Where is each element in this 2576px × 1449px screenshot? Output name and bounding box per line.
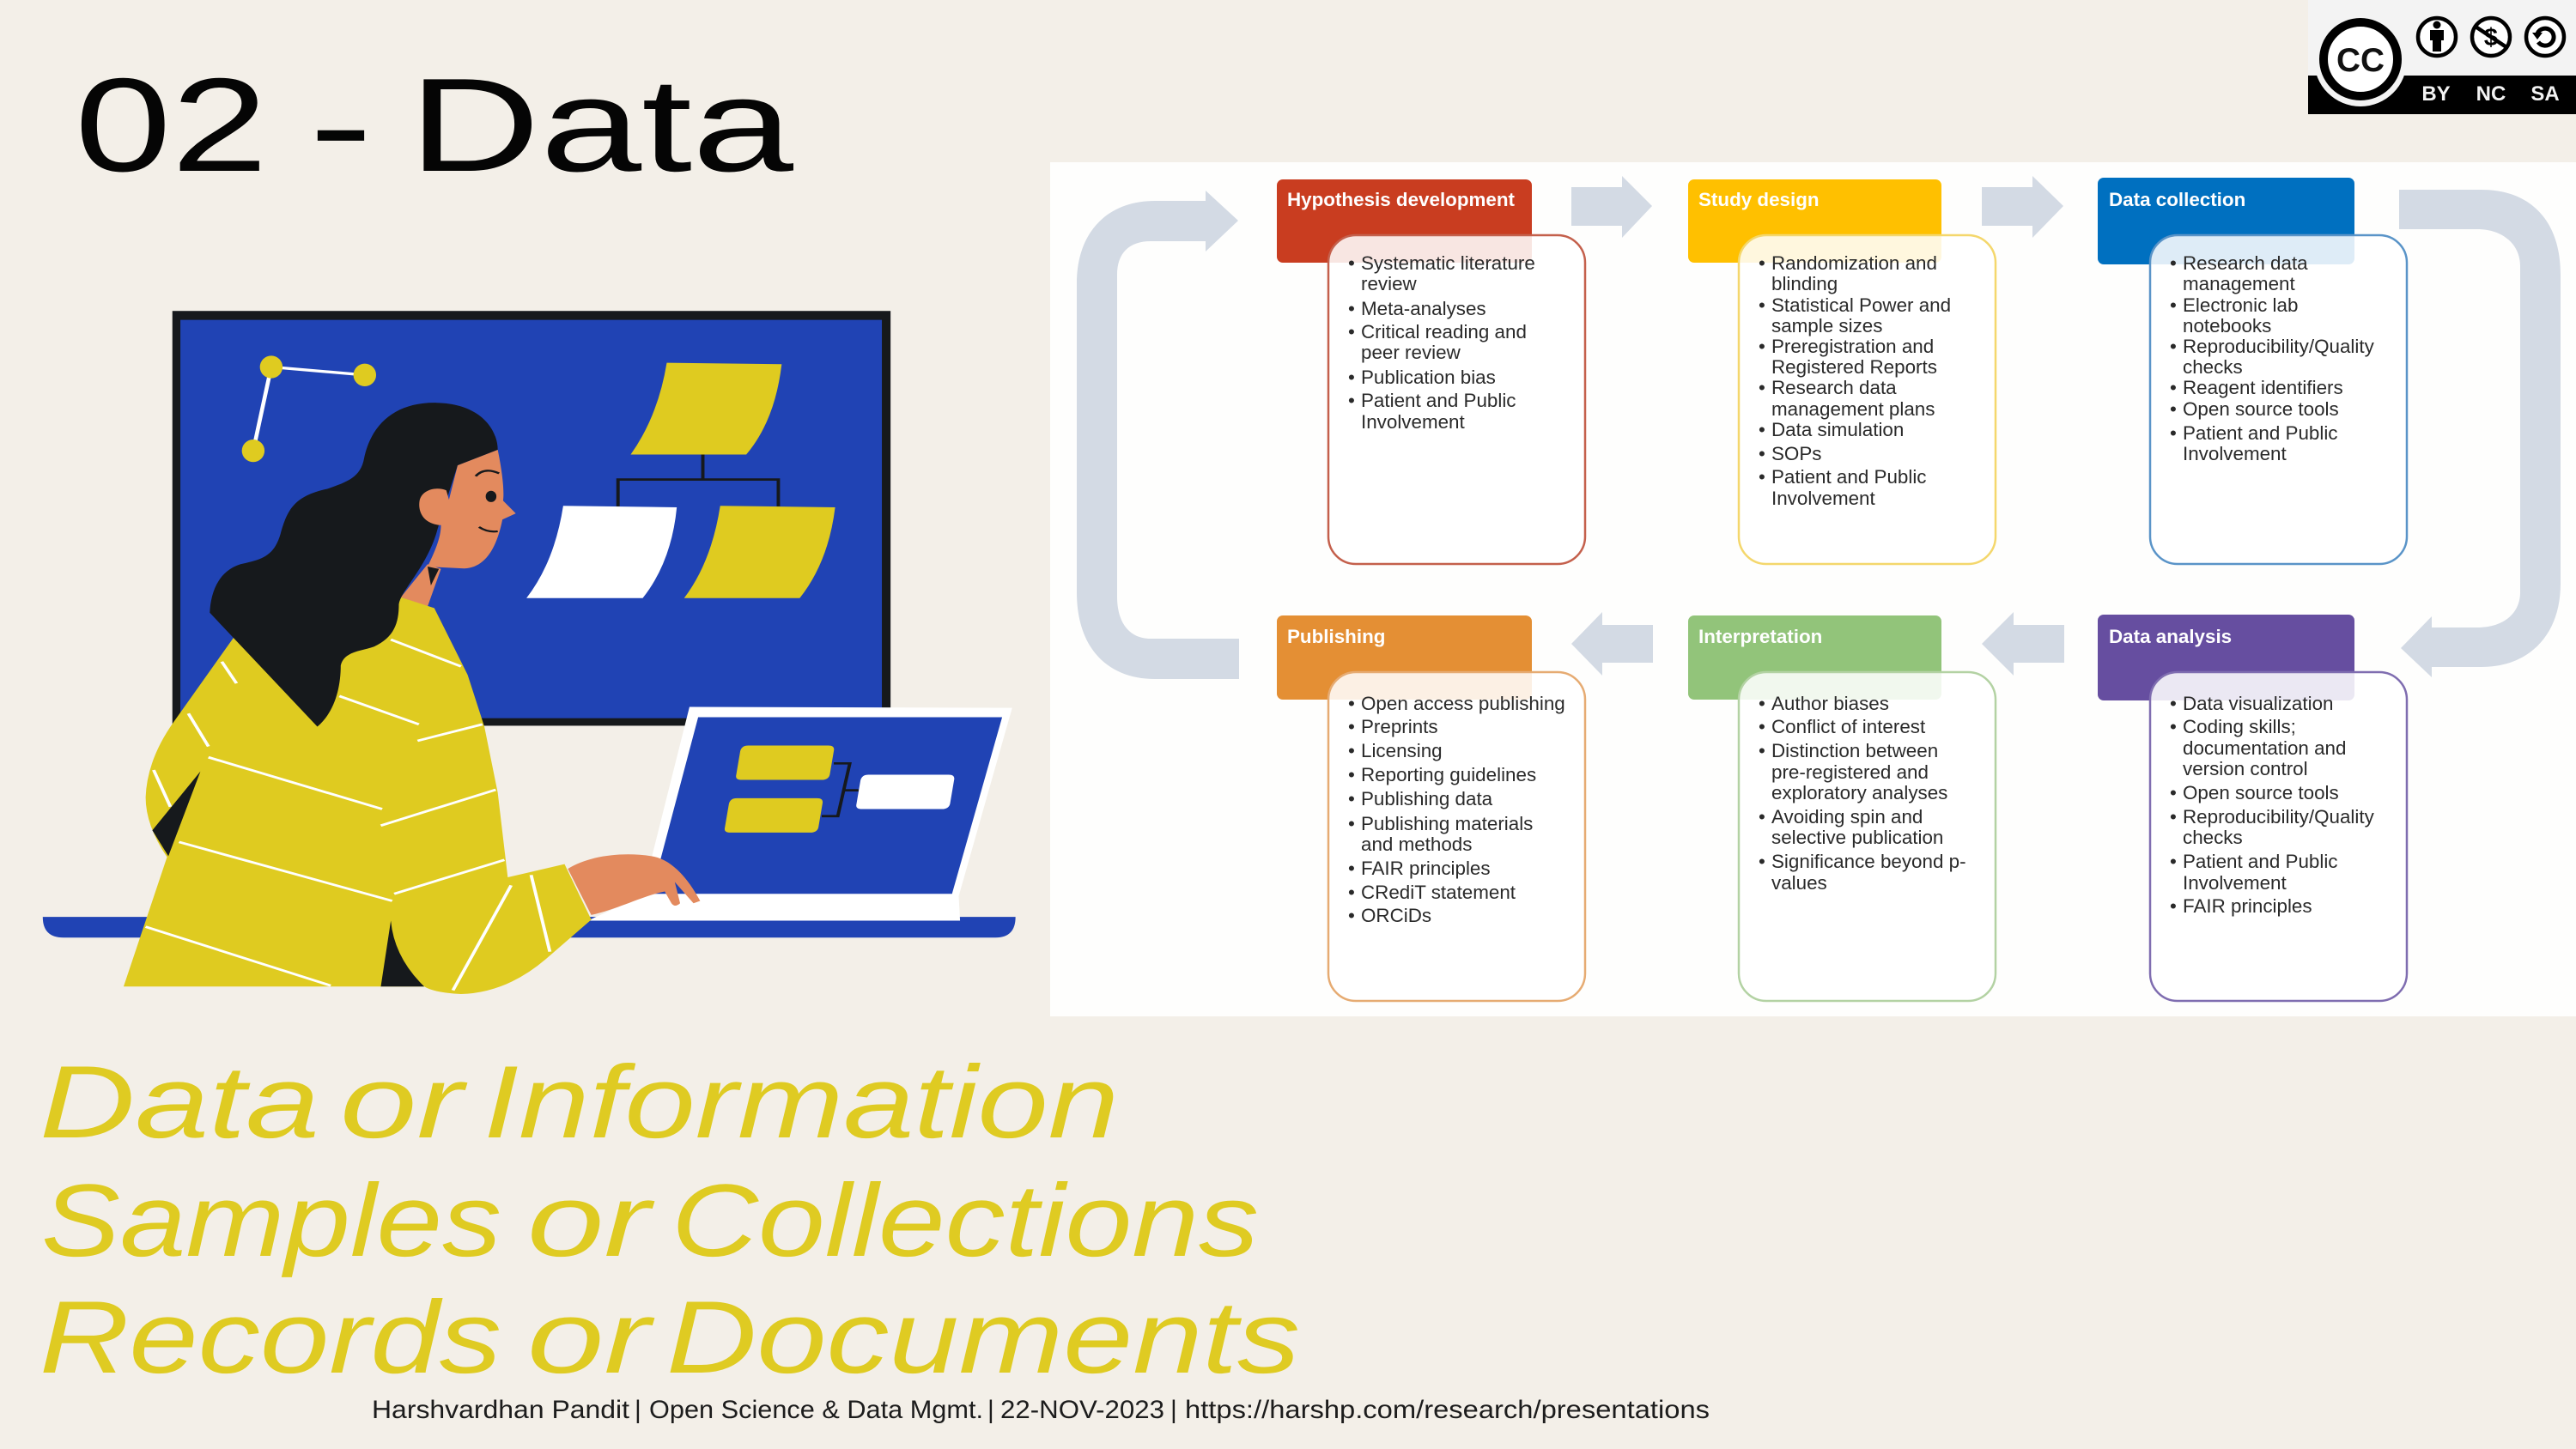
keyword lines: Documents (666, 1280, 1300, 1395)
card: publishing: • (1348, 693, 1355, 714)
card: publishing: Publishing materials (1361, 813, 1533, 834)
laptop (588, 706, 1012, 920)
card: data collection: Research data (2183, 252, 2308, 274)
card: data collection: • (2170, 398, 2177, 420)
keyword lines: Records (39, 1280, 501, 1395)
illustration: woman working at laptop in front of board (43, 311, 1016, 994)
footer: | (635, 1396, 641, 1424)
card: study design: Research data (1771, 377, 1897, 398)
panel: research cycle diagram (1050, 162, 2576, 1016)
card: study design: sample sizes (1771, 315, 1882, 336)
card: publishing: Open access publishing (1361, 693, 1565, 714)
card: publishing: • (1348, 813, 1355, 834)
badge labels (2421, 82, 2560, 106)
card: publishing: • (1348, 882, 1355, 903)
card: hypothesis development: • (1348, 367, 1355, 388)
card: publishing: and methods (1361, 834, 1472, 855)
card: data collection: Reproducibility/Quality (2183, 336, 2375, 357)
card: publishing: Publishing data (1361, 788, 1493, 809)
card: hypothesis development: • (1348, 252, 1355, 274)
card: study design: • (1759, 443, 1765, 464)
keyword lines: or (527, 1280, 654, 1395)
card: data collection: • (2170, 252, 2177, 274)
card: study design: • (1759, 336, 1765, 357)
keyword lines: or (340, 1045, 467, 1160)
badge labels: NC (2476, 82, 2506, 106)
card: data collection: • (2170, 422, 2177, 444)
icon: non-commercial: $ (2484, 24, 2498, 52)
license badge: CC BY-NC-SA (2308, 0, 2576, 114)
card: study design: • (1759, 466, 1765, 488)
card: data collection: management (2183, 273, 2295, 294)
title: 02 (75, 51, 268, 199)
card: publishing: • (1348, 740, 1355, 761)
card: interpretation: • (1759, 740, 1765, 761)
card: interpretation: • (1759, 693, 1765, 714)
card: interpretation: • (1759, 716, 1765, 737)
desk (43, 917, 1016, 937)
badge labels: SA (2530, 82, 2560, 106)
card: hypothesis development: review (1361, 273, 1418, 294)
card: data analysis: • (2170, 806, 2177, 828)
card: data analysis: version control (2183, 758, 2308, 779)
keyword lines: Data (39, 1045, 319, 1160)
card: publishing: • (1348, 788, 1355, 809)
card: data collection: • (2170, 377, 2177, 398)
card: interpretation: Avoiding spin and (1771, 806, 1923, 828)
card: publishing: • (1348, 764, 1355, 785)
arrow: loop from data collection to data analysis (2399, 190, 2561, 677)
card: hypothesis development (1277, 179, 1585, 564)
card: data analysis: • (2170, 693, 2177, 714)
card: data collection: notebooks (2183, 315, 2271, 336)
card: publishing: ORCiDs (1361, 905, 1431, 926)
card: data analysis: Reproducibility/Quality (2183, 806, 2375, 828)
card: study design: • (1759, 252, 1765, 274)
keyword lines: Samples (41, 1163, 501, 1278)
card: hypothesis development: Publication bias (1361, 367, 1496, 388)
card: study design: SOPs (1771, 443, 1821, 464)
card: data collection: Reagent identifiers (2183, 377, 2343, 398)
card: study design: Patient and Public (1771, 466, 1927, 488)
card: publishing: • (1348, 858, 1355, 879)
card: hypothesis development: Systematic literature (1361, 252, 1535, 274)
card: data analysis (2098, 615, 2407, 1001)
title: - (309, 51, 373, 199)
card: data analysis: documentation and (2183, 737, 2346, 759)
card: hypothesis development: • (1348, 321, 1355, 343)
card: data analysis: Involvement (2183, 872, 2287, 894)
card: interpretation: Distinction between (1771, 740, 1938, 761)
badge labels: BY (2421, 82, 2451, 106)
card: interpretation: pre-registered and (1771, 761, 1929, 783)
card: interpretation: Author biases (1771, 693, 1889, 714)
card: hypothesis development: Patient and Public (1361, 390, 1516, 411)
card: data analysis: FAIR principles (2183, 895, 2312, 917)
card: study design: Statistical Power and (1771, 294, 1951, 316)
card: interpretation: Interpretation (1698, 626, 1822, 647)
card: study design: Involvement (1771, 488, 1876, 509)
footer: | (987, 1396, 994, 1424)
card: data collection: Open source tools (2183, 398, 2339, 420)
card: interpretation: exploratory analyses (1771, 782, 1947, 803)
card: data analysis: Open source tools (2183, 782, 2339, 803)
card: study design (1688, 179, 1996, 564)
card: data collection: Electronic lab (2183, 294, 2298, 316)
card: study design: Data simulation (1771, 419, 1904, 440)
card: interpretation (1688, 615, 1996, 1001)
board (173, 311, 890, 725)
card: interpretation: • (1759, 806, 1765, 828)
card: data collection: Involvement (2183, 443, 2287, 464)
keyword lines: or (527, 1163, 654, 1278)
icon: network nodes (242, 355, 376, 462)
card: hypothesis development: • (1348, 298, 1355, 319)
card: publishing: CRediT statement (1361, 882, 1516, 903)
card: publishing: • (1348, 905, 1355, 926)
card: publishing: Reporting guidelines (1361, 764, 1536, 785)
woman (124, 403, 700, 994)
card: study design: • (1759, 377, 1765, 398)
card: hypothesis development: Involvement (1361, 411, 1466, 433)
footer: Open Science & Data Mgmt. (649, 1396, 983, 1424)
card: publishing (1277, 615, 1585, 1001)
card: hypothesis development: peer review (1361, 342, 1461, 363)
card: study design: management plans (1771, 398, 1935, 420)
footer: https://harshp.com/research/presentations (1185, 1396, 1710, 1424)
card: data analysis: Coding skills; (2183, 716, 2296, 737)
card: interpretation: • (1759, 851, 1765, 872)
card: data analysis: • (2170, 782, 2177, 803)
card: hypothesis development: • (1348, 390, 1355, 411)
card: hypothesis development: Meta-analyses (1361, 298, 1486, 319)
card: publishing: Preprints (1361, 716, 1438, 737)
card: hypothesis development: Hypothesis development (1287, 189, 1516, 210)
card: data analysis: • (2170, 851, 2177, 872)
card: study design: • (1759, 294, 1765, 316)
icon: cc: CC (2336, 42, 2385, 79)
card: data analysis: Data visualization (2183, 693, 2334, 714)
card: interpretation: values (1771, 872, 1827, 894)
card: study design: blinding (1771, 273, 1838, 294)
card: interpretation: Significance beyond p- (1771, 851, 1966, 872)
card: data analysis: • (2170, 716, 2177, 737)
card: data collection: Patient and Public (2183, 422, 2337, 444)
card: interpretation: Conflict of interest (1771, 716, 1926, 737)
card: publishing: Publishing (1287, 626, 1385, 647)
card: data analysis: Patient and Public (2183, 851, 2337, 872)
card: publishing: Licensing (1361, 740, 1443, 761)
card: data analysis: Data analysis (2109, 626, 2232, 647)
card: interpretation: selective publication (1771, 827, 1943, 848)
card: hypothesis development: Critical reading and (1361, 321, 1527, 343)
footer: Harshvardhan Pandit (372, 1396, 630, 1424)
card: data analysis: • (2170, 895, 2177, 917)
keyword lines (39, 1045, 1300, 1395)
keyword lines: Information (483, 1045, 1119, 1160)
card: data collection: checks (2183, 356, 2243, 378)
card: data collection: • (2170, 294, 2177, 316)
card: publishing: • (1348, 716, 1355, 737)
card: data collection: Data collection (2109, 189, 2245, 210)
arrow: study design to data collection (1982, 176, 2063, 238)
card: study design: Preregistration and (1771, 336, 1934, 357)
icon: cc (2314, 14, 2407, 106)
arrow: loop from publishing to hypothesis (1077, 191, 1239, 679)
arrow: hypothesis to study design (1571, 176, 1652, 238)
sticky note hierarchy (526, 363, 835, 598)
keyword lines: Collections (671, 1163, 1259, 1278)
footer: | (1170, 1396, 1177, 1424)
icon: share-alike (2526, 18, 2564, 56)
title (75, 51, 794, 199)
footer (372, 1396, 1710, 1424)
footer: 22-NOV-2023 (1000, 1396, 1164, 1424)
card: study design: Study design (1698, 189, 1820, 210)
card: data analysis: checks (2183, 827, 2243, 848)
card: publishing: FAIR principles (1361, 858, 1491, 879)
icon: non-commercial (2472, 18, 2510, 56)
arrow: data analysis to interpretation (1982, 612, 2064, 676)
arrow: interpretation to publishing (1571, 612, 1653, 676)
card: data collection (2098, 178, 2407, 564)
card: study design: Randomization and (1771, 252, 1937, 274)
card: data collection: • (2170, 336, 2177, 357)
icon: attribution (2418, 18, 2456, 56)
title: Data (409, 51, 794, 199)
card: study design: • (1759, 419, 1765, 440)
card: study design: Registered Reports (1771, 356, 1937, 378)
